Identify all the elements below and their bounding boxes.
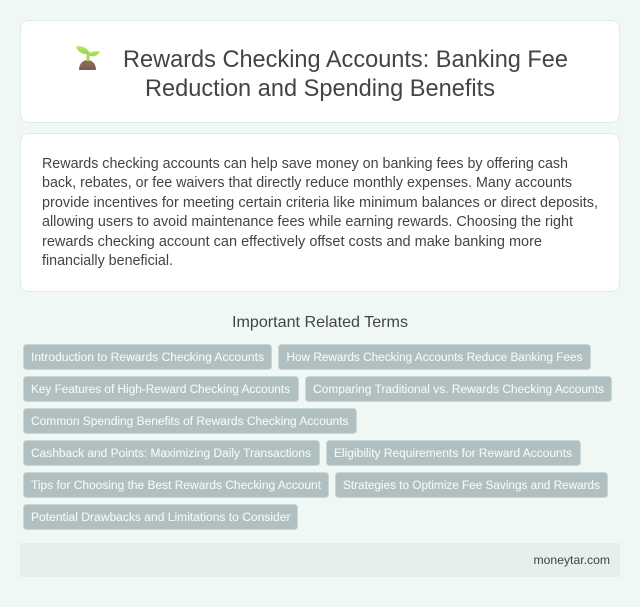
title: Reduction and Spending Benefits — [145, 75, 495, 102]
tag list — [24, 344, 612, 530]
tag — [336, 472, 608, 498]
footer — [20, 543, 620, 577]
tag: Potential Drawbacks and Limitations to Consider — [31, 510, 290, 524]
tag: Introduction to Rewards Checking Accounts — [31, 350, 264, 364]
tag: Key Features of High-Reward Checking Accounts — [31, 382, 290, 396]
tag: Common Spending Benefits of Rewards Checking Accounts — [31, 414, 348, 428]
footer credit: moneytar.com — [534, 553, 610, 567]
tag: Strategies to Optimize Fee Savings and Rewards — [343, 478, 600, 492]
icon: sprout — [76, 46, 100, 70]
tag — [24, 504, 298, 530]
title: Rewards Checking Accounts: Banking Fee — [123, 46, 568, 73]
text block: description: back, rebates, or fee waivers that directly reduce monthly expenses. Many accounts — [42, 175, 572, 191]
text block: description: provide incentives for meeting certain criteria like minimum balances or direct deposits, — [42, 195, 598, 211]
tag — [306, 376, 612, 402]
tag — [24, 376, 298, 402]
title — [123, 46, 568, 102]
tag — [24, 472, 328, 498]
tag: How Rewards Checking Accounts Reduce Banking Fees — [286, 350, 582, 364]
tag: Eligibility Requirements for Reward Accounts — [334, 446, 572, 460]
tag — [278, 344, 590, 370]
tag — [24, 408, 356, 434]
text block: description: financially beneficial. — [42, 253, 173, 269]
tag — [24, 440, 320, 466]
text block: description — [42, 156, 598, 269]
tag — [24, 344, 272, 370]
tag: Tips for Choosing the Best Rewards Checking Account — [31, 478, 322, 492]
tag: Comparing Traditional vs. Rewards Checking Accounts — [313, 382, 604, 396]
text block: description: allowing users to avoid maintenance fees while earning rewards. Choosing the right — [42, 214, 573, 230]
tag — [326, 440, 580, 466]
panel: description — [20, 134, 620, 292]
text block: description: rewards checking account can effectively offset costs and make banking more — [42, 234, 542, 250]
tag: Cashback and Points: Maximizing Daily Transactions — [31, 446, 311, 460]
panel: title header — [20, 20, 620, 122]
heading: related terms: Important Related Terms — [232, 314, 408, 331]
text block: description: Rewards checking accounts can help save money on banking fees by offering cash — [42, 156, 568, 172]
